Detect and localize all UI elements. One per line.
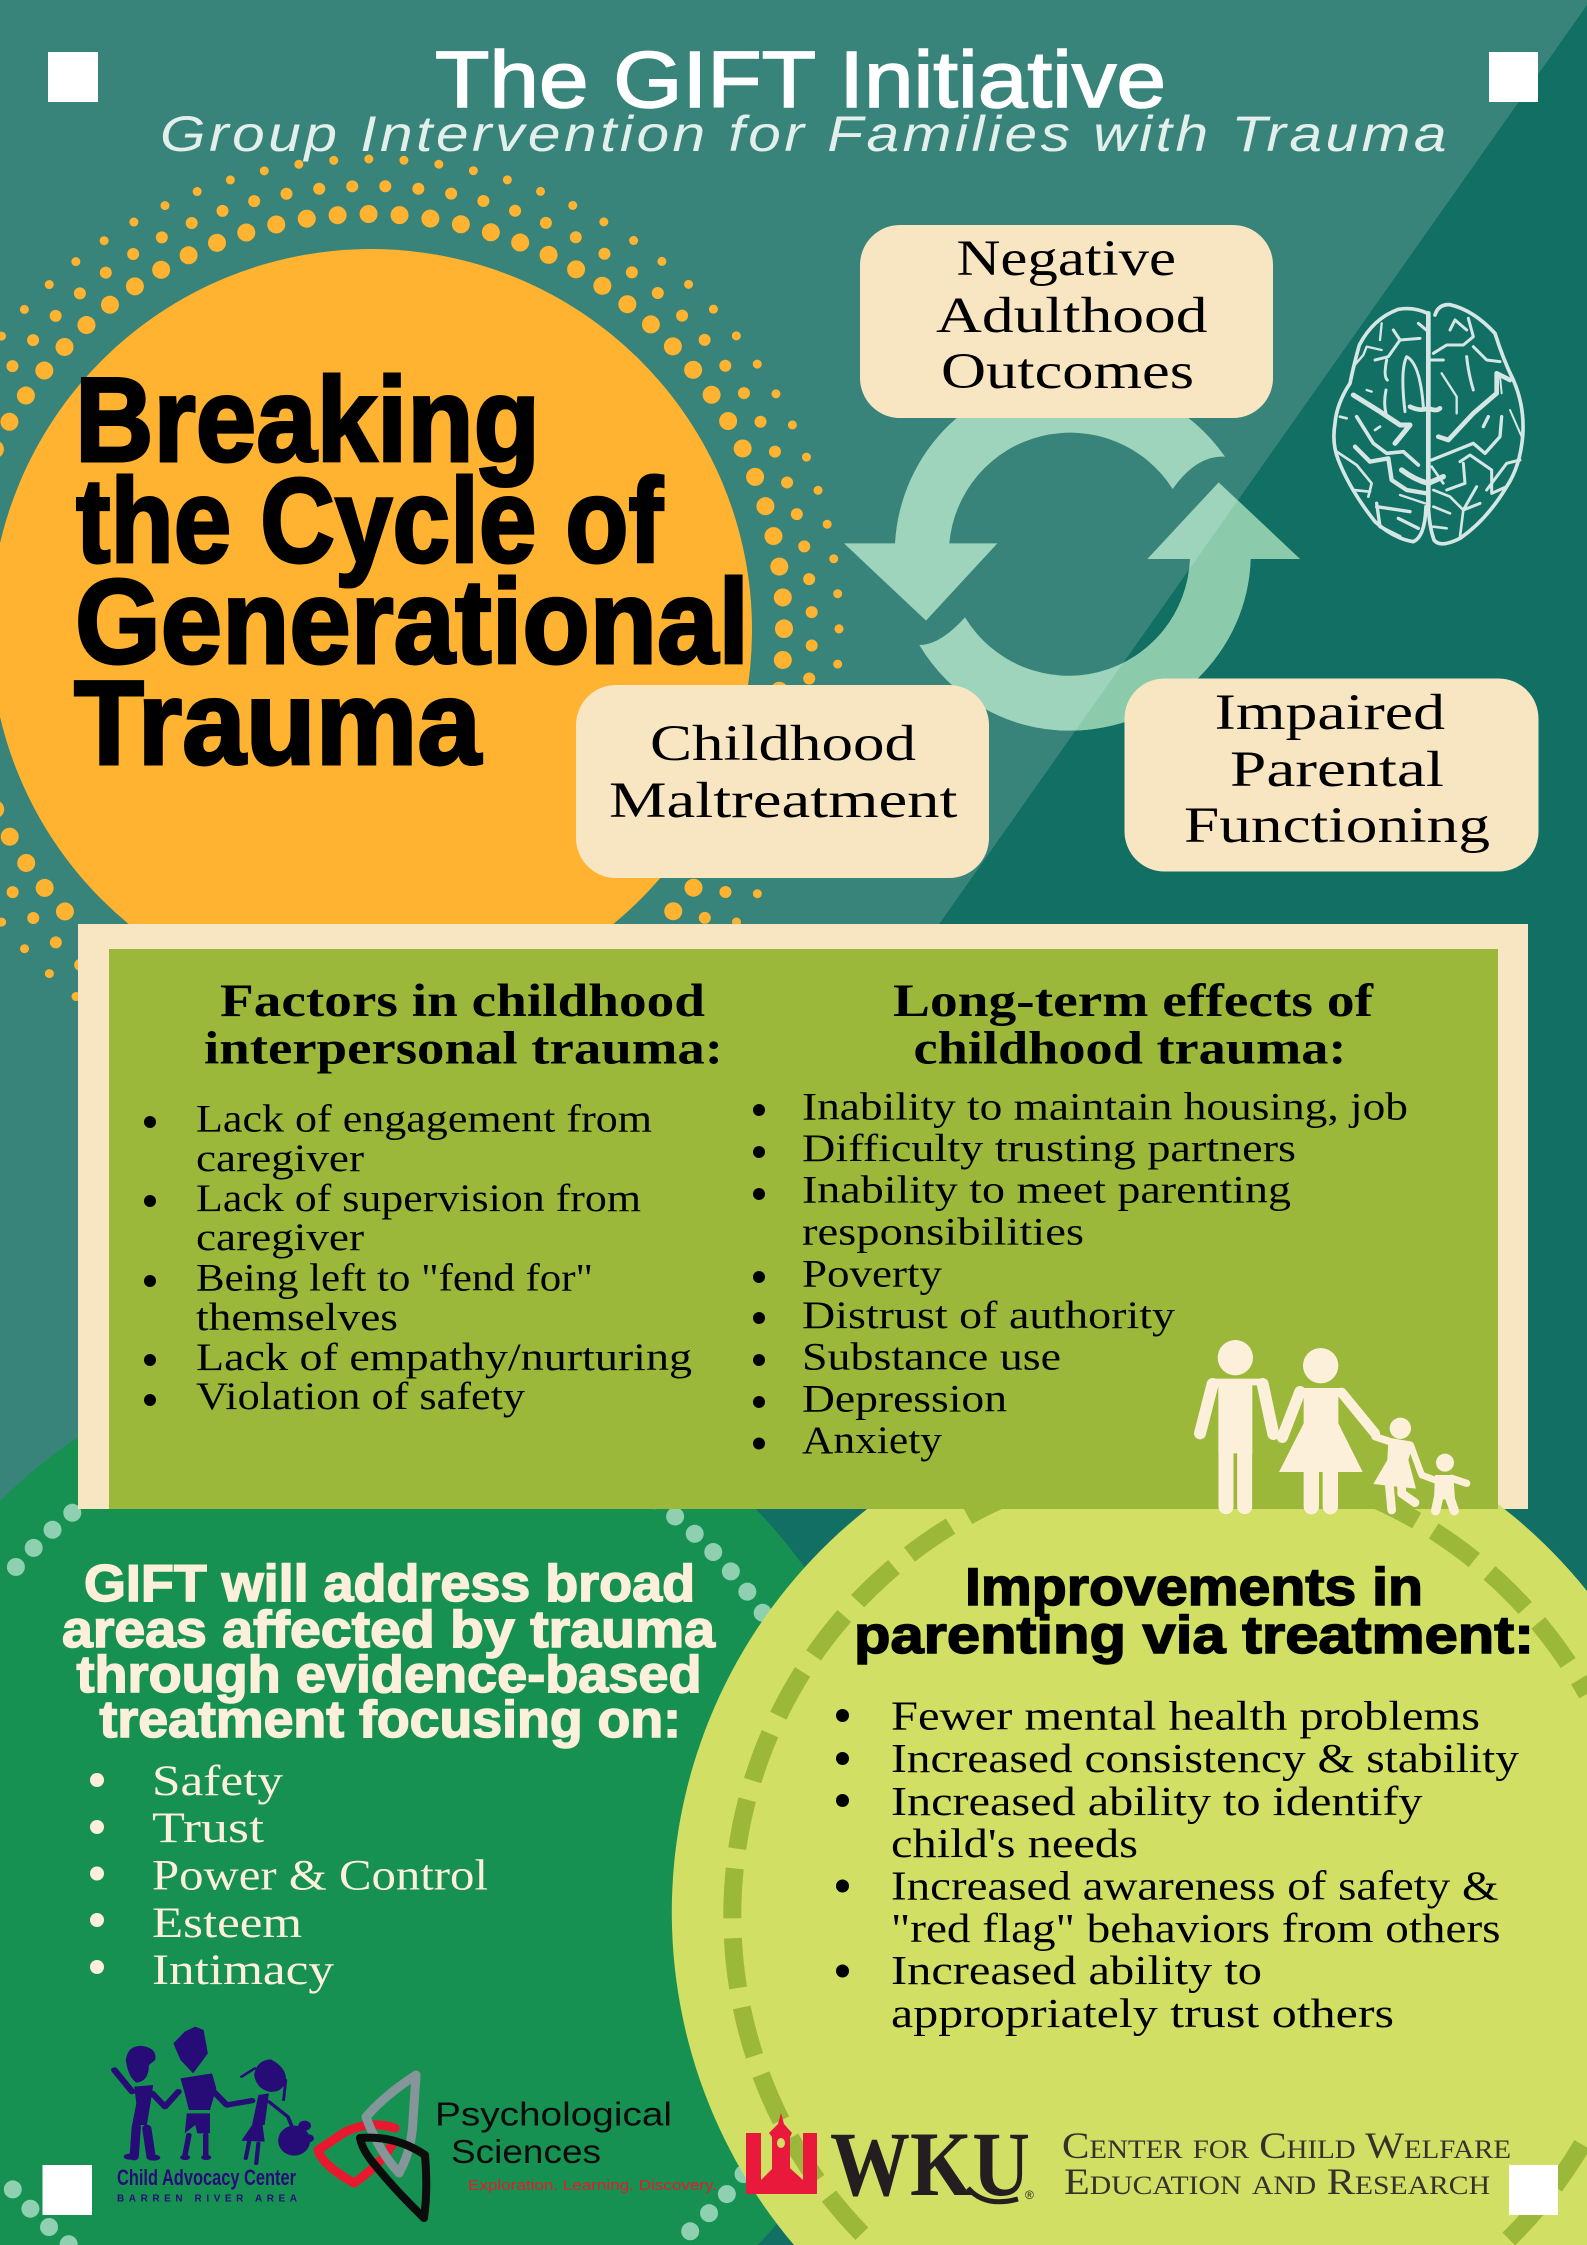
box: Childhood Maltreatment: Maltreatment <box>609 773 958 829</box>
list: factors: Lack of engagement from <box>196 1098 652 1140</box>
logo: Psychological Sciences: Psychological <box>435 2096 672 2132</box>
arrow: top-left <box>844 377 1225 621</box>
heading: Improvements in parenting: Improvements in <box>965 1558 1423 1617</box>
heading: effects: Long-term effects of <box>893 975 1375 1027</box>
heading: GIFT will address: treatment focusing on: <box>100 1691 681 1749</box>
icon: brain <box>1334 305 1523 544</box>
list: improvements <box>836 1692 1520 2036</box>
heading: factors <box>204 975 723 1074</box>
cycle arrows <box>844 377 1300 731</box>
box: Negative Adulthood Outcomes <box>860 225 1273 418</box>
box: Childhood Maltreatment <box>576 685 989 878</box>
olive panel background <box>109 949 1498 1509</box>
main heading: the Cycle of <box>76 454 664 588</box>
box: Impaired Parental Functioning: Impaired <box>1215 685 1445 741</box>
list: factors: Violation of safety <box>196 1375 526 1418</box>
list: effects: Substance use <box>802 1336 1061 1378</box>
logo: WKU: WKU <box>830 2113 1030 2215</box>
list: GIFT focus areas: Esteem <box>152 1900 302 1947</box>
logo: WKU: Education and Research <box>1064 2162 1490 2203</box>
corner square bottom left <box>42 2165 92 2215</box>
logo: Child Advocacy Center: BARREN RIVER AREA <box>117 2194 297 2204</box>
logo: WKU: Center for Child Welfare <box>1062 2126 1511 2167</box>
girl <box>1373 1418 1435 1510</box>
list: GIFT focus areas <box>90 1758 488 1994</box>
list: effects: Depression <box>802 1378 1007 1420</box>
green circle panel <box>0 1347 905 2245</box>
logo: Psychological Sciences: Exploration. Learning. Discovery. <box>468 2177 717 2194</box>
list: improvements: Increased ability to identify <box>891 1778 1423 1824</box>
box: Negative Adulthood Outcomes: Negative <box>956 231 1176 287</box>
list: effects <box>753 1086 1408 1462</box>
list: effects: Inability to maintain housing, job <box>802 1086 1408 1128</box>
icon: family <box>1200 1340 1467 1511</box>
title <box>160 35 1450 162</box>
list: improvements: Fewer mental health problems <box>891 1692 1480 1738</box>
list: factors: Lack of empathy/nurturing <box>196 1336 692 1379</box>
corner square top left <box>48 52 98 102</box>
list: GIFT focus areas: Intimacy <box>152 1947 335 1994</box>
arrow shade over dark background <box>1076 500 1300 730</box>
box: Impaired Parental Functioning <box>1124 678 1538 872</box>
list: improvements: Increased consistency & stability <box>891 1735 1520 1781</box>
logo: Psychological Sciences <box>318 2075 717 2218</box>
logo: WKU <box>746 2113 1511 2215</box>
heading: GIFT will address: areas affected by trauma <box>62 1601 716 1659</box>
box: Negative Adulthood Outcomes: Outcomes <box>941 344 1194 400</box>
main heading: Trauma <box>74 656 482 790</box>
heading: GIFT will address: GIFT will address broad <box>84 1555 695 1613</box>
panel frame (cream) <box>78 924 1528 1509</box>
logo: Psychological Sciences: Sciences <box>451 2133 601 2170</box>
list: improvements: appropriately trust others <box>891 1990 1394 2036</box>
main heading: Generational <box>75 555 749 689</box>
heading: GIFT will address <box>62 1555 716 1749</box>
list: improvements: Increased ability to <box>891 1947 1262 1993</box>
list: improvements: child's needs <box>891 1820 1138 1866</box>
heading: effects: childhood trauma: <box>914 1022 1346 1074</box>
list: factors <box>144 1098 692 1418</box>
heading: GIFT will address: through evidence-based <box>76 1646 702 1704</box>
box: Impaired Parental Functioning: Parental <box>1230 742 1444 798</box>
logo text: Child Advocacy Center <box>117 2165 296 2190</box>
title: Group Intervention for Families with Trauma <box>160 106 1450 162</box>
list: effects: Anxiety <box>802 1419 943 1462</box>
list: effects: Inability to meet parenting <box>802 1168 1291 1212</box>
main heading <box>74 353 749 790</box>
list: factors: Being left to "fend for" <box>196 1256 593 1300</box>
list: factors: caregiver <box>196 1216 364 1259</box>
panel: trauma factors and effects <box>109 949 1498 1509</box>
dashed ring on lime circle <box>732 1459 1587 2245</box>
list: GIFT focus areas: Safety <box>152 1758 284 1805</box>
logo: WKU: ® <box>1025 2188 1034 2202</box>
logo: Child Advocacy Center <box>114 2027 314 2204</box>
list: effects: responsibilities <box>802 1210 1084 1254</box>
list: GIFT focus areas: Power & Control <box>152 1852 488 1900</box>
list: factors: Lack of supervision from <box>196 1177 641 1220</box>
arrow: bottom-right <box>919 482 1300 731</box>
green dotted ring <box>0 1406 845 2245</box>
lime circle panel <box>672 1398 1587 2245</box>
heading: Improvements in parenting <box>854 1558 1534 1665</box>
corner square bottom right <box>1509 2165 1558 2215</box>
orange halftone dot ring <box>0 159 839 1099</box>
man <box>1200 1340 1273 1507</box>
orange circle <box>0 249 752 1011</box>
emblem <box>318 2075 426 2218</box>
woman <box>1279 1348 1375 1507</box>
box: Childhood Maltreatment: Childhood <box>650 716 916 772</box>
list: factors: caregiver <box>196 1137 364 1180</box>
list: improvements: Increased awareness of safety & <box>891 1862 1499 1908</box>
list: GIFT focus areas: Trust <box>152 1805 264 1852</box>
heading: effects <box>893 975 1375 1074</box>
corner square top right <box>1489 52 1538 102</box>
list: effects: Distrust of authority <box>802 1294 1176 1337</box>
silhouettes of children <box>114 2027 314 2163</box>
main heading: Breaking <box>75 353 540 487</box>
heading: Improvements in parenting: parenting via treatment: <box>854 1606 1534 1665</box>
heading: factors: Factors in childhood <box>220 975 705 1027</box>
box: Impaired Parental Functioning: Functioning <box>1184 798 1490 854</box>
list: effects: Poverty <box>802 1252 943 1296</box>
title: The GIFT Initiative <box>435 35 1166 124</box>
list: improvements: "red flag" behaviors from others <box>891 1905 1500 1951</box>
box: Negative Adulthood Outcomes: Adulthood <box>936 288 1208 344</box>
list: effects: Difficulty trusting partners <box>802 1127 1296 1170</box>
boy <box>1434 1454 1467 1511</box>
list: factors: themselves <box>196 1296 398 1339</box>
heading: factors: interpersonal trauma: <box>204 1022 723 1074</box>
WKU red emblem <box>746 2113 817 2194</box>
